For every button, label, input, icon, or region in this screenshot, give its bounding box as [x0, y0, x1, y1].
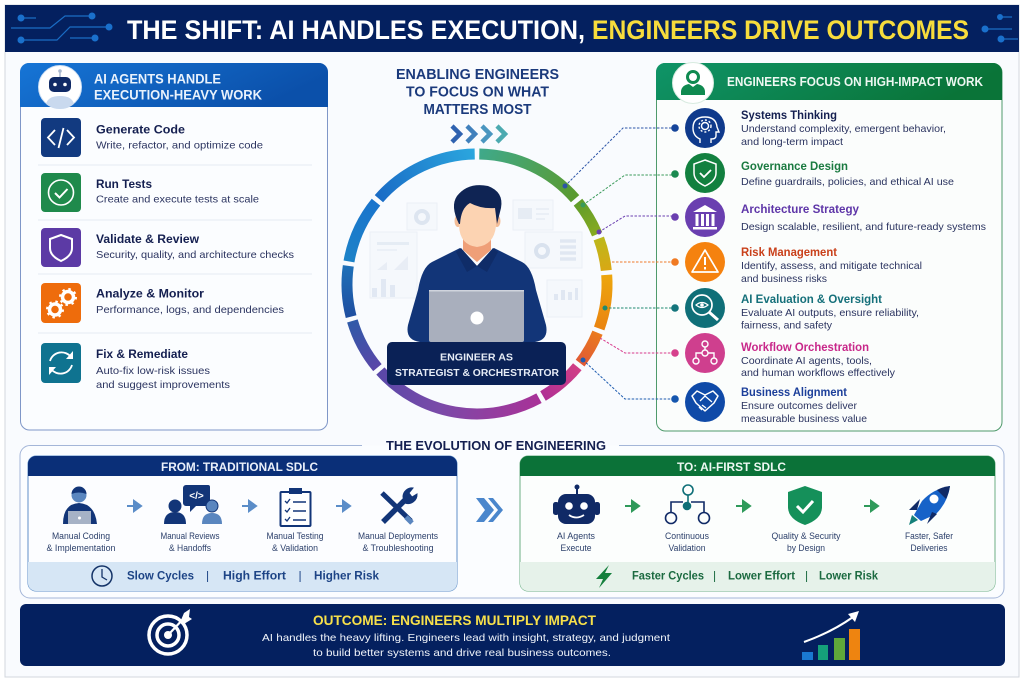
summary: AI-first: |	[805, 568, 808, 582]
panel heading: ENGINEERS FOCUS ON HIGH-IMPACT WORK	[727, 75, 983, 89]
step: continuous validation: Validation	[668, 543, 706, 553]
item: AI evaluation and oversight: AI Evaluation & Oversight	[741, 292, 882, 306]
outcome heading: OUTCOME: ENGINEERS MULTIPLY IMPACT	[313, 613, 597, 628]
step: continuous validation	[665, 485, 710, 553]
item: generate code: Write, refactor, and optimize code	[96, 140, 263, 152]
outcome text: AI handles the heavy lifting. Engineers lead with insight, strategy, and judgment	[262, 632, 670, 644]
step: manual coding: Manual Coding	[52, 531, 110, 541]
progress ring	[347, 154, 607, 414]
connectors	[565, 128, 675, 399]
item: analyze and monitor: Analyze & Monitor	[96, 286, 204, 300]
arrow	[127, 501, 141, 511]
arrow	[336, 501, 350, 511]
item: run tests: Run Tests	[96, 177, 152, 191]
item: fix and remediate: Fix & Remediate	[96, 347, 188, 361]
item: fix and remediate: and suggest improvements	[96, 379, 230, 391]
panel: evolution of engineering	[20, 439, 1004, 598]
item: AI evaluation and oversight: fairness, and safety	[741, 320, 833, 332]
step: AI agents: AI Agents	[557, 531, 595, 541]
panel heading: TO: AI-FIRST SDLC	[677, 460, 786, 474]
step: manual deployments: Manual Deployments	[358, 531, 438, 541]
item: systems thinking	[685, 108, 946, 148]
step: manual testing: Manual Testing	[266, 531, 324, 541]
panel: traditional SDLC	[28, 456, 457, 591]
summary: traditional: High Effort	[223, 568, 286, 582]
item: analyze and monitor	[41, 283, 284, 323]
summary: AI-first: Faster Cycles	[632, 568, 704, 582]
item: validate and review	[41, 228, 294, 267]
laptop	[429, 290, 524, 342]
summary: AI-first: |	[713, 568, 716, 582]
step: manual coding: & Implementation	[46, 543, 116, 553]
step: manual coding	[46, 486, 116, 553]
item: workflow orchestration: Workflow Orchestration	[741, 340, 869, 354]
outcome text	[262, 632, 670, 659]
summary: traditional: Slow Cycles	[127, 568, 194, 582]
item: run tests: Create and execute tests at scale	[96, 194, 259, 206]
icon: double chevron	[476, 498, 503, 522]
title banner	[5, 5, 1019, 52]
section heading: THE EVOLUTION OF ENGINEERING	[386, 439, 606, 453]
item: business alignment	[685, 382, 867, 425]
summary: traditional: |	[206, 568, 209, 582]
step: manual reviews: & Handoffs	[169, 543, 211, 553]
item: risk management	[685, 242, 922, 285]
step: manual deployments	[358, 488, 438, 553]
panel heading: FROM: TRADITIONAL SDLC	[161, 460, 318, 474]
outcome text: to build better systems and drive real business outcomes.	[313, 647, 611, 659]
item: systems thinking: Understand complexity, emergent behavior,	[741, 123, 946, 135]
centre heading: ENABLING ENGINEERS	[396, 67, 559, 83]
item: run tests	[41, 173, 259, 212]
icon: target	[149, 609, 192, 654]
item: risk management: and business risks	[741, 273, 827, 285]
step: quality and security: Quality & Security	[772, 531, 841, 541]
panel: AI-first SDLC	[520, 456, 995, 591]
item: AI evaluation and oversight	[685, 288, 919, 332]
arrow	[736, 501, 750, 511]
arrow	[864, 501, 878, 511]
item: architecture strategy	[685, 197, 986, 237]
panel: AI agents	[20, 63, 328, 430]
item: business alignment: measurable business value	[741, 413, 867, 425]
summary: traditional: |	[298, 568, 302, 582]
item: generate code	[41, 118, 263, 157]
step: manual deployments: & Troubleshooting	[362, 543, 434, 553]
icon: chevrons	[452, 126, 505, 142]
arrow	[625, 501, 639, 511]
icon: right circuit decoration	[982, 14, 1018, 42]
item: generate code: Generate Code	[96, 122, 185, 136]
item: validate and review: Security, quality, and architecture checks	[96, 249, 294, 261]
item: business alignment: Ensure outcomes deliver	[741, 400, 857, 412]
item: architecture strategy: Architecture Strategy	[741, 202, 859, 216]
icon: growth chart	[802, 611, 860, 660]
item: AI evaluation and oversight: Evaluate AI outputs, ensure reliability,	[741, 307, 919, 319]
step: manual reviews	[160, 485, 222, 553]
item: analyze and monitor: Performance, logs, and dependencies	[96, 304, 284, 316]
panel header	[656, 63, 1002, 100]
item: workflow orchestration: Coordinate AI agents, tools,	[741, 355, 872, 367]
item: architecture strategy: Design scalable, resilient, and future-ready systems	[741, 221, 986, 233]
step: quality and security	[772, 486, 841, 553]
centre heading: MATTERS MOST	[424, 102, 532, 118]
engineer figure	[408, 185, 547, 342]
item: governance design: Define guardrails, policies, and ethical AI use	[741, 176, 954, 188]
centre heading: TO FOCUS ON WHAT	[406, 84, 549, 100]
step: manual reviews: Manual Reviews	[160, 531, 220, 541]
background dashboard cards	[370, 200, 582, 317]
step: AI agents	[553, 484, 600, 553]
item: workflow orchestration: and human workflows effectively	[741, 367, 896, 379]
outcome banner	[20, 604, 1005, 666]
title text: THE SHIFT: AI HANDLES EXECUTION,	[127, 15, 585, 45]
summary: traditional: Higher Risk	[314, 568, 379, 582]
step: AI agents: Execute	[560, 543, 592, 553]
icon: left circuit decoration	[11, 12, 112, 44]
step: faster deliveries: Faster, Safer	[905, 531, 953, 541]
item: systems thinking: and long-term impact	[741, 136, 843, 148]
title highlight: ENGINEERS DRIVE OUTCOMES	[592, 15, 969, 45]
icon: robot	[38, 66, 82, 109]
summary: AI-first: Lower Risk	[819, 568, 878, 582]
step: faster deliveries: Deliveries	[910, 543, 948, 553]
centre heading	[396, 67, 559, 118]
summary: AI-first: Lower Effort	[728, 568, 795, 582]
item: risk management: Risk Management	[741, 245, 837, 259]
step: manual testing: & Validation	[272, 543, 318, 553]
step: continuous validation: Continuous	[665, 531, 709, 541]
step: quality and security: by Design	[787, 543, 825, 553]
engineer label: STRATEGIST & ORCHESTRATOR	[395, 367, 559, 379]
panel: engineers	[656, 62, 1002, 431]
item: business alignment: Business Alignment	[741, 385, 847, 399]
item: validate and review: Validate & Review	[96, 232, 200, 246]
item: fix and remediate: Auto-fix low-risk issues	[96, 365, 210, 377]
engineer label: ENGINEER AS	[440, 352, 513, 364]
item: governance design: Governance Design	[741, 159, 848, 173]
summary: traditional	[92, 566, 379, 586]
connector dots	[562, 124, 679, 403]
icon: engineer badge	[672, 62, 714, 104]
panel heading	[94, 72, 262, 102]
panel heading: AI AGENTS HANDLE	[94, 72, 221, 86]
item: governance design	[685, 153, 954, 193]
arrow	[242, 501, 256, 511]
panel header	[20, 63, 328, 107]
step: manual reviews: </>	[189, 491, 204, 502]
item: risk management: Identify, assess, and mitigate technical	[741, 260, 922, 272]
panel heading: EXECUTION-HEAVY WORK	[94, 88, 262, 102]
item: fix and remediate	[41, 343, 230, 391]
item: systems thinking: Systems Thinking	[741, 108, 837, 122]
engineer label	[387, 342, 566, 385]
step: faster deliveries	[905, 486, 953, 553]
item: workflow orchestration	[685, 333, 896, 379]
step: manual testing	[266, 488, 324, 553]
summary: AI-first	[596, 565, 878, 588]
